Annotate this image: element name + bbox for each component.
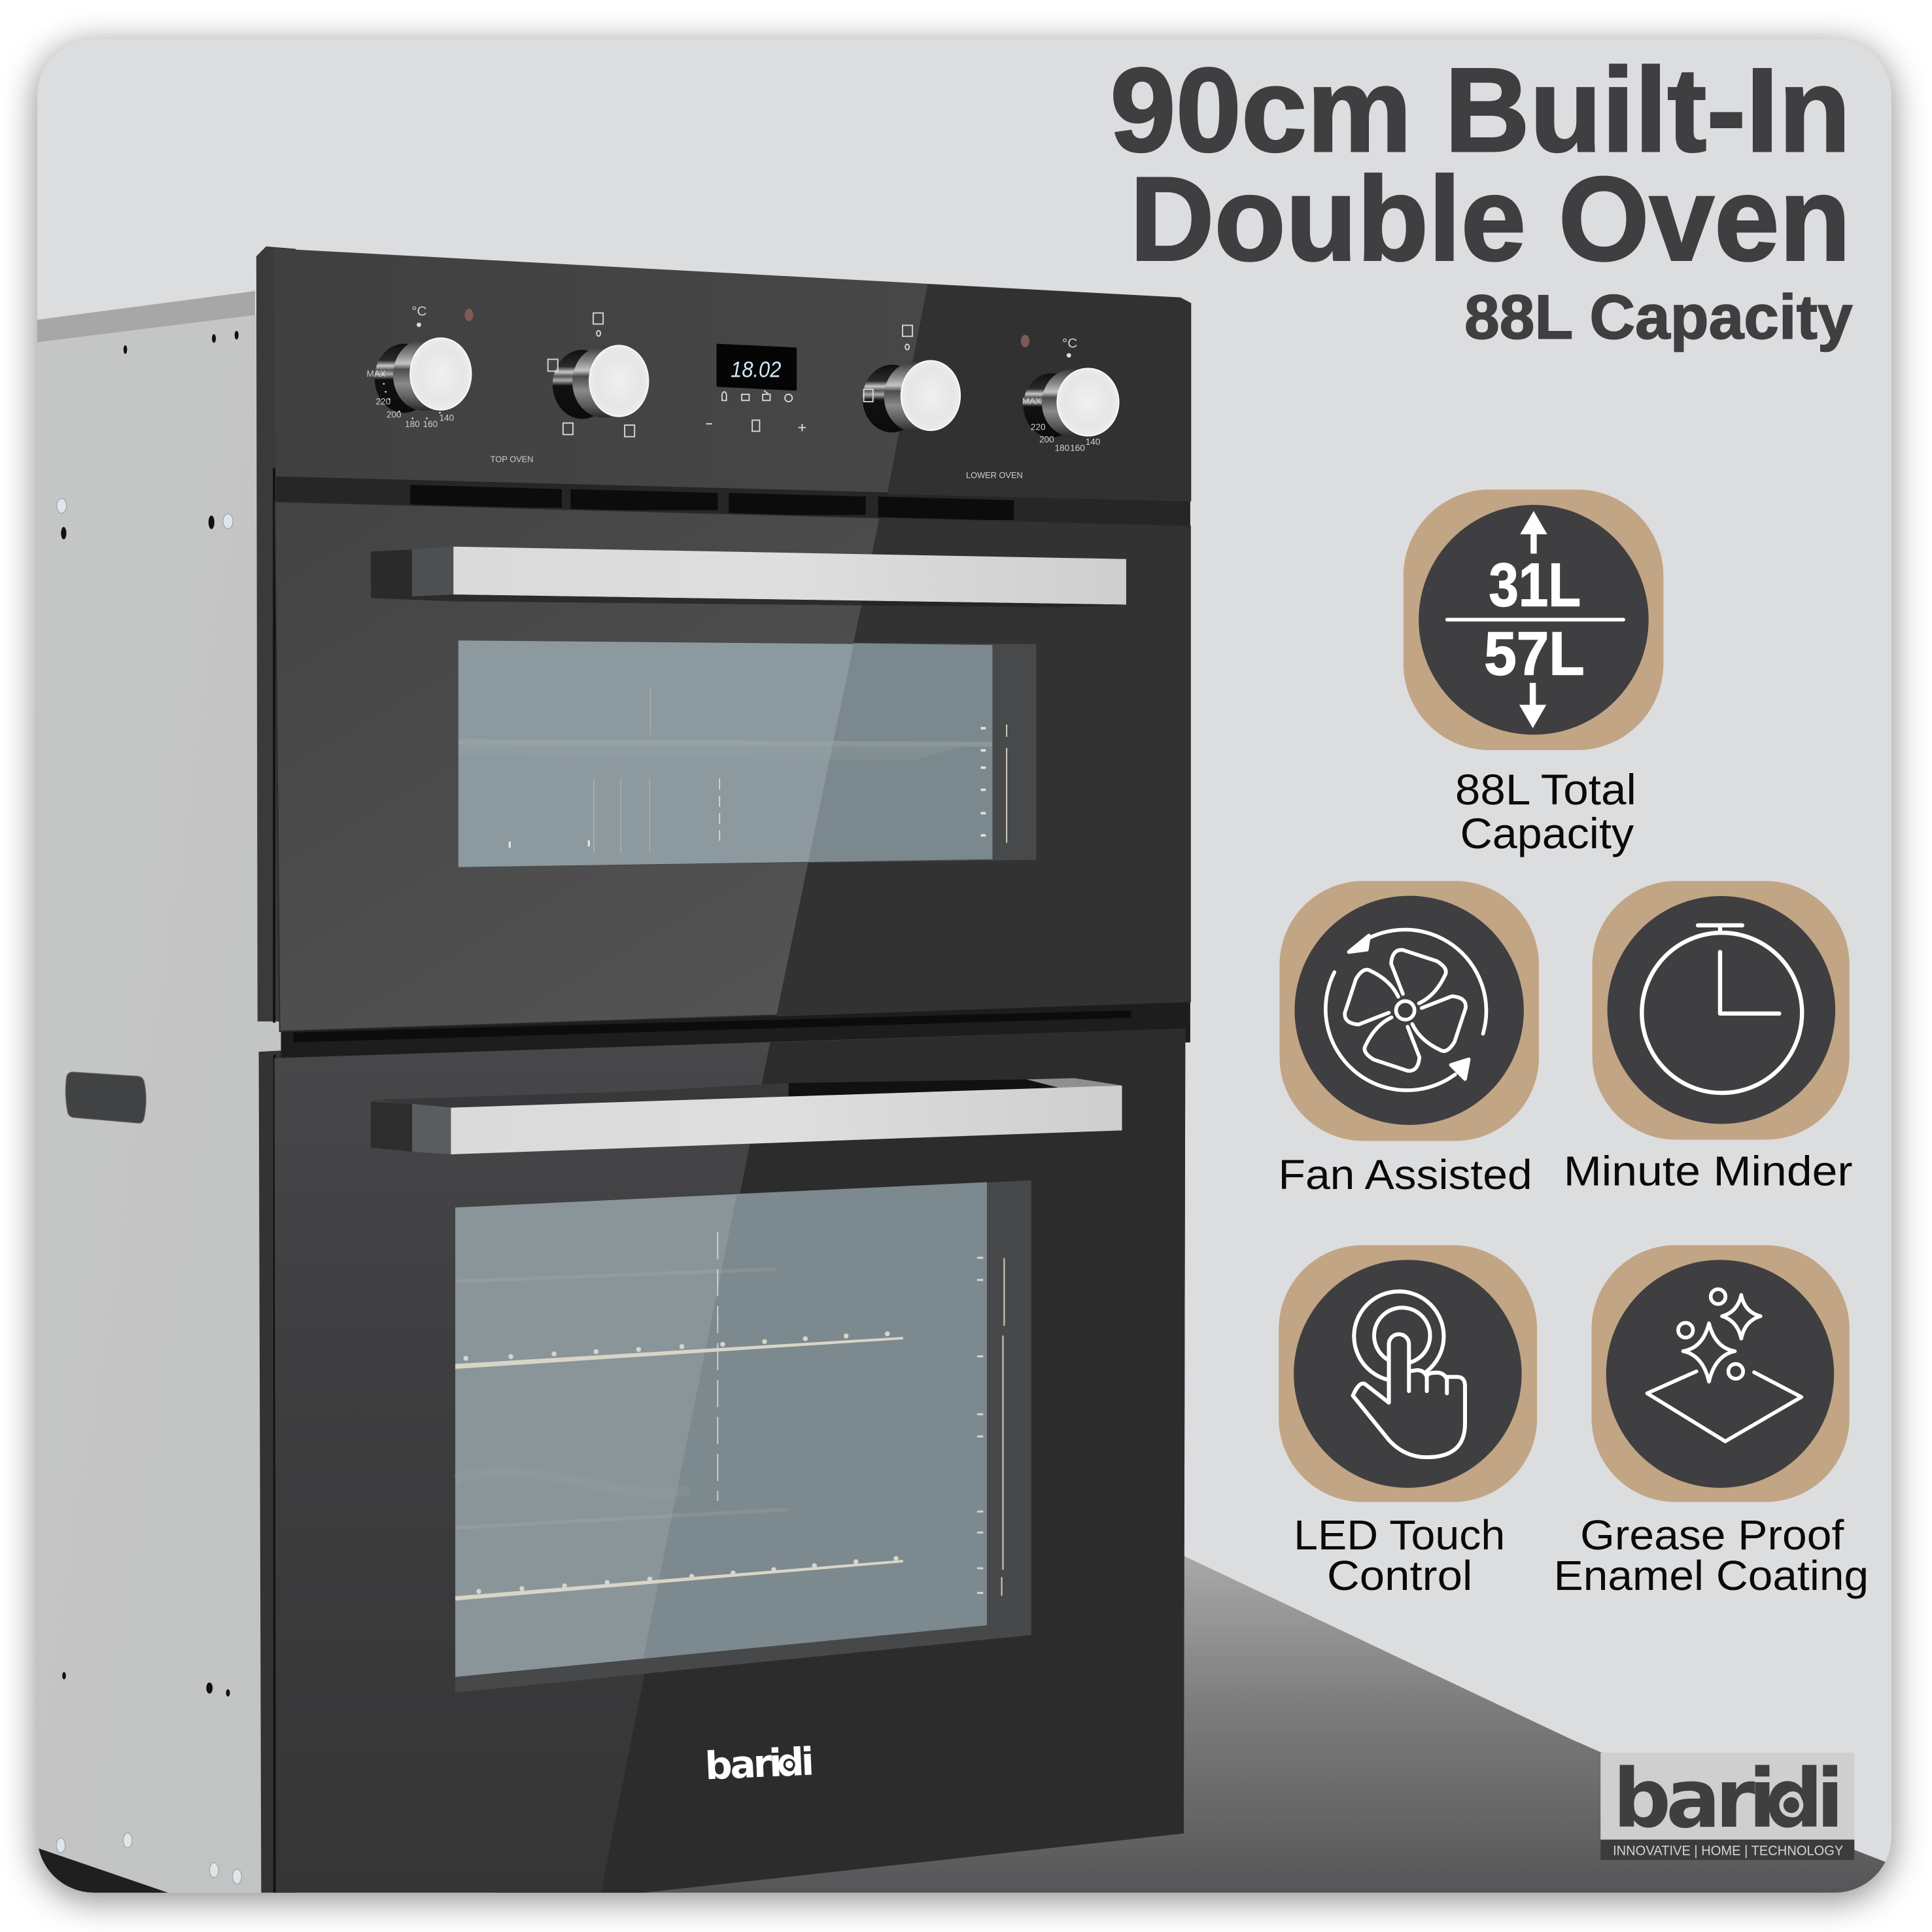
function symbols and indicator lights bbox=[382, 309, 1071, 437]
door logo: baridi bbox=[704, 1739, 815, 1788]
temperature markings: 220 bbox=[1031, 422, 1046, 432]
icon: timer bbox=[1642, 925, 1802, 1093]
temperature markings: MAX bbox=[1022, 396, 1041, 406]
icon: fan bbox=[1326, 929, 1486, 1090]
temperature markings: 200 bbox=[387, 410, 402, 420]
temperature markings: MAX bbox=[367, 369, 386, 379]
top oven door bbox=[275, 502, 1190, 1031]
temperature markings: 200 bbox=[1039, 434, 1054, 444]
feature: LED touch control bbox=[1279, 1245, 1537, 1599]
feature: grease proof enamel coating: Enamel Coating bbox=[1554, 1552, 1869, 1599]
feature: 88L total capacity: Capacity bbox=[1460, 809, 1634, 857]
top oven temperature knob bbox=[375, 338, 472, 413]
top door window bbox=[458, 640, 1036, 867]
digital clock display bbox=[717, 345, 795, 389]
icon: down arrow bbox=[1519, 683, 1546, 728]
title bbox=[1110, 43, 1852, 352]
icon: touch hand bbox=[1353, 1292, 1465, 1457]
oven side panel bbox=[35, 291, 286, 1897]
temperature markings: 140 bbox=[440, 413, 454, 423]
temperature markings: 140 bbox=[1086, 437, 1100, 447]
lower oven door bbox=[275, 1029, 1185, 1897]
floor shadow wedge bbox=[493, 1553, 1897, 1897]
feature: grease proof enamel coating: Grease Proof bbox=[1580, 1511, 1844, 1559]
feature: LED touch control: Control bbox=[1327, 1552, 1472, 1599]
feature: minute minder bbox=[1564, 881, 1853, 1194]
feature: fan assisted bbox=[1279, 881, 1539, 1198]
oven control panel bbox=[273, 249, 1191, 502]
temperature markings: 180 bbox=[1055, 443, 1069, 453]
title: Double Oven bbox=[1130, 152, 1851, 286]
lower door window bbox=[455, 1181, 1031, 1693]
lower oven function knob bbox=[863, 360, 960, 432]
temperature markings: 180 bbox=[405, 419, 420, 429]
temperature markings: °C bbox=[1062, 336, 1077, 351]
icon: sparkle surface bbox=[1647, 1289, 1801, 1441]
feature: LED touch control: LED Touch bbox=[1294, 1511, 1505, 1559]
temperature markings: 220 bbox=[376, 397, 390, 407]
temperature markings: 160 bbox=[423, 419, 438, 429]
title: 88L Capacity bbox=[1464, 283, 1852, 352]
lower door handle bbox=[371, 1078, 1122, 1154]
temperature markings: °C bbox=[411, 303, 427, 319]
touch icons bbox=[706, 390, 806, 431]
temperature markings: 160 bbox=[1070, 443, 1085, 453]
title: 90cm Built-In bbox=[1110, 43, 1851, 177]
oven frame bbox=[256, 247, 1190, 1897]
feature: 88L total capacity: 31L bbox=[1489, 550, 1581, 619]
brand logo: baridi bbox=[1613, 1752, 1844, 1846]
feature: fan assisted: Fan Assisted bbox=[1279, 1151, 1532, 1198]
feature: 88L total capacity: 88L Total bbox=[1455, 765, 1636, 814]
lower oven temperature knob bbox=[1024, 368, 1119, 438]
brand logo: INNOVATIVE | HOME | TECHNOLOGY bbox=[1613, 1842, 1843, 1858]
oven racks bbox=[455, 1232, 1004, 1600]
temperature markings: LOWER OVEN bbox=[966, 470, 1023, 480]
digital clock display: 18.02 bbox=[731, 357, 782, 382]
feature: 88L total capacity: 57L bbox=[1484, 619, 1585, 687]
feature: minute minder: Minute Minder bbox=[1564, 1147, 1853, 1194]
temperature markings: TOP OVEN bbox=[491, 454, 533, 464]
feature: grease proof enamel coating bbox=[1554, 1245, 1869, 1599]
temperature markings bbox=[367, 303, 1100, 480]
top door handle bbox=[371, 547, 1126, 608]
feature: 88L total capacity bbox=[1404, 489, 1663, 857]
icon: up arrow bbox=[1520, 511, 1547, 553]
top oven function knob bbox=[553, 345, 649, 419]
